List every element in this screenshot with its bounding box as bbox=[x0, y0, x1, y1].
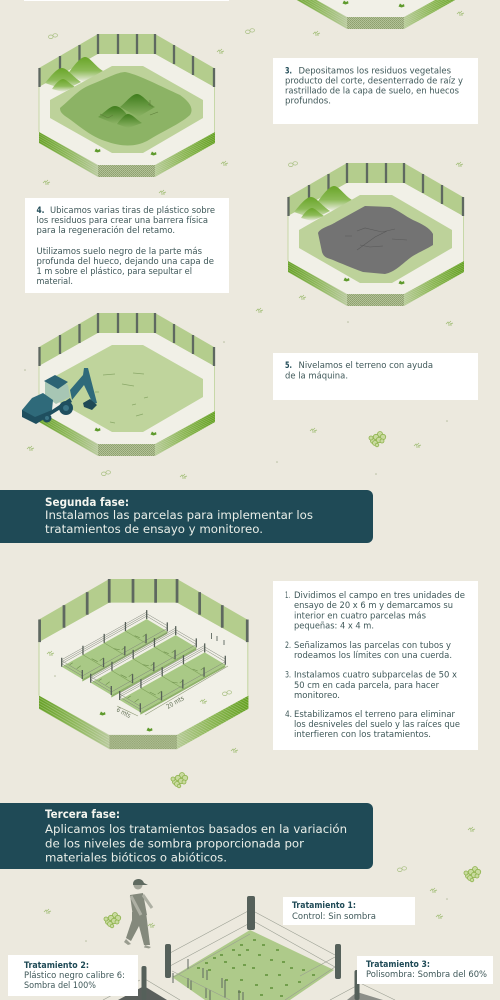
residue piles bbox=[98, 94, 158, 128]
hole filled with residues bbox=[60, 72, 192, 146]
text block: step 3: producto del corte, desenterrado de raíz y bbox=[285, 76, 463, 86]
callout: treatment 2: Tratamiento 2: bbox=[24, 961, 89, 971]
text block: step 4: Ubicamos varias tiras de plástico sobre bbox=[50, 206, 215, 216]
text block: step 5: de la máquina. bbox=[285, 372, 348, 382]
text block: second phase steps: Señalizamos las parcelas con tubos y bbox=[294, 641, 451, 651]
dimension 6 mts: 6 mts bbox=[115, 706, 133, 720]
plot ground bbox=[172, 930, 334, 1000]
torso bbox=[130, 893, 147, 917]
spare tubes bbox=[212, 633, 224, 645]
icon: excavator bbox=[22, 368, 97, 424]
terrain marks bbox=[95, 373, 148, 423]
trial unit 1 bbox=[62, 610, 167, 682]
dimension 20 mts bbox=[145, 666, 228, 715]
heading banner: second phase bbox=[0, 490, 373, 543]
levelled plot bbox=[50, 345, 203, 432]
text block: second phase steps: Instalamos cuatro subparcelas de 50 x bbox=[294, 670, 457, 680]
text block: second phase steps: los desniveles del suelo y las raíces que bbox=[294, 720, 460, 730]
legs bbox=[126, 912, 150, 945]
text block: second phase steps: 3. bbox=[285, 670, 291, 680]
text block: step 3: 3. bbox=[285, 66, 292, 76]
heading banner: third phase bbox=[0, 803, 373, 869]
large wheel bbox=[59, 401, 73, 415]
heading banner: second phase: Segunda fase: bbox=[45, 495, 129, 509]
text block: second phase steps: ensayo de 20 x 6 m y demarcamos su bbox=[294, 601, 453, 611]
heading banner: second phase: Instalamos las parcelas para implementar los bbox=[45, 508, 313, 522]
heading banner: third phase: materiales bióticos o abióticos. bbox=[45, 850, 227, 864]
text block: second phase steps: monitoreo. bbox=[294, 691, 340, 701]
text block: step 3 bbox=[273, 58, 478, 124]
text block: second phase steps: 1. bbox=[285, 591, 290, 601]
head bbox=[134, 880, 142, 890]
arm bbox=[70, 368, 97, 404]
callout: treatment 3 bbox=[357, 956, 493, 984]
hood bbox=[22, 393, 53, 422]
small tubes bbox=[173, 959, 243, 1000]
text block: second phase steps: 2. bbox=[285, 641, 291, 651]
text block: second phase steps: interfieren con los tratamientos. bbox=[294, 730, 431, 740]
text block: step 4 bbox=[25, 198, 229, 293]
hole edge bbox=[50, 66, 203, 153]
illustration: polyshade plot bbox=[347, 970, 383, 1000]
text block: step 4: para la regeneración del retamo. bbox=[36, 225, 175, 236]
heading banner: third phase: Aplicamos los tratamientos basados en la variación bbox=[45, 822, 347, 836]
ropes bbox=[103, 910, 395, 1000]
callout: treatment 2: Plástico negro calibre 6: bbox=[24, 971, 125, 981]
illustration: residues deposited in deep hole bbox=[39, 34, 215, 177]
callout: treatment 3: Tratamiento 3: bbox=[366, 960, 430, 970]
illustration: levelled terrain with machine bbox=[22, 313, 215, 456]
post left bbox=[165, 944, 171, 978]
bucket bbox=[83, 399, 97, 410]
heading banner: third phase: de los niveles de sombra proporcionada por bbox=[45, 836, 304, 850]
text block: step 3: rastrillado de la capa de suelo, en huecos bbox=[285, 86, 459, 96]
illustration: plastic strips and black soil layer bbox=[288, 163, 464, 306]
text block: second phase steps: Dividimos el campo en tres unidades de bbox=[294, 591, 465, 601]
callout: treatment 1: Control: Sin sombra bbox=[292, 912, 376, 922]
text block: step 5: 5. bbox=[285, 361, 292, 371]
illustration: field with three trial units bbox=[39, 579, 248, 749]
cap bbox=[133, 879, 148, 885]
text block: step 3: Depositamos los residuos vegetales bbox=[298, 66, 451, 76]
text block: second phase steps bbox=[273, 581, 478, 750]
trial unit 2 bbox=[91, 626, 196, 698]
text block: step 4: Utilizamos suelo negro de la parte más bbox=[36, 247, 202, 257]
cab roof bbox=[44, 375, 68, 389]
text block: second phase steps: Estabilizamos el terreno para eliminar bbox=[294, 710, 455, 720]
post back bbox=[247, 896, 255, 930]
text block: second phase steps: interior en cuatro parcelas más bbox=[294, 612, 426, 622]
callout: treatment 2 bbox=[8, 955, 138, 996]
cracks bbox=[345, 228, 407, 250]
dimension 20 mts: 20 mts bbox=[165, 694, 186, 711]
arms bbox=[131, 895, 152, 915]
text block: step 4: 4. bbox=[36, 206, 44, 216]
illustration: control plot without shade bbox=[103, 896, 395, 1000]
callout: treatment 3: Polisombra: Sombra del 60% bbox=[366, 970, 487, 980]
cab glass bbox=[45, 377, 70, 404]
text block: second phase steps: rodeamos los límites con una cuerda. bbox=[294, 651, 452, 661]
icon: farmer walking bbox=[124, 879, 152, 948]
text block: step 5 bbox=[273, 353, 478, 400]
small wheel bbox=[42, 414, 52, 422]
text block: step 4: los residuos para crear una barrera física bbox=[36, 216, 208, 226]
hole edge bbox=[299, 195, 452, 283]
text block: step 3: profundos. bbox=[285, 96, 331, 106]
callout: treatment 2: Sombra del 100% bbox=[24, 981, 96, 991]
trial unit 3 bbox=[120, 643, 225, 715]
black soil bbox=[318, 206, 433, 274]
text block: second phase steps: 4. bbox=[285, 710, 292, 720]
heading banner: third phase: Tercera fase: bbox=[45, 807, 120, 821]
illustration: black plastic plot bbox=[118, 966, 167, 1000]
post right bbox=[335, 944, 341, 979]
text block: second phase steps: 50 cm en cada parcela, para hacer bbox=[294, 681, 439, 691]
text block: second phase steps: pequeñas: 4 x 4 m. bbox=[294, 622, 374, 632]
callout: treatment 1 bbox=[283, 897, 415, 925]
text block: step 4: 1 m sobre el plástico, para sepultar el bbox=[36, 267, 192, 277]
text block: step 4: material. bbox=[36, 277, 73, 287]
illustration: field with cut residues cropped at top bbox=[288, 0, 464, 29]
callout: treatment 1: Tratamiento 1: bbox=[292, 901, 356, 911]
boots bbox=[124, 939, 151, 948]
heading banner: second phase: tratamientos de ensayo y monitoreo. bbox=[45, 522, 263, 536]
top white panel fragment bbox=[24, 0, 229, 1]
text block: step 5: Nivelamos el terreno con ayuda bbox=[298, 361, 433, 371]
seedlings bbox=[197, 940, 315, 996]
text block: step 4: profunda del hueco, dejando una capa de bbox=[36, 257, 214, 267]
